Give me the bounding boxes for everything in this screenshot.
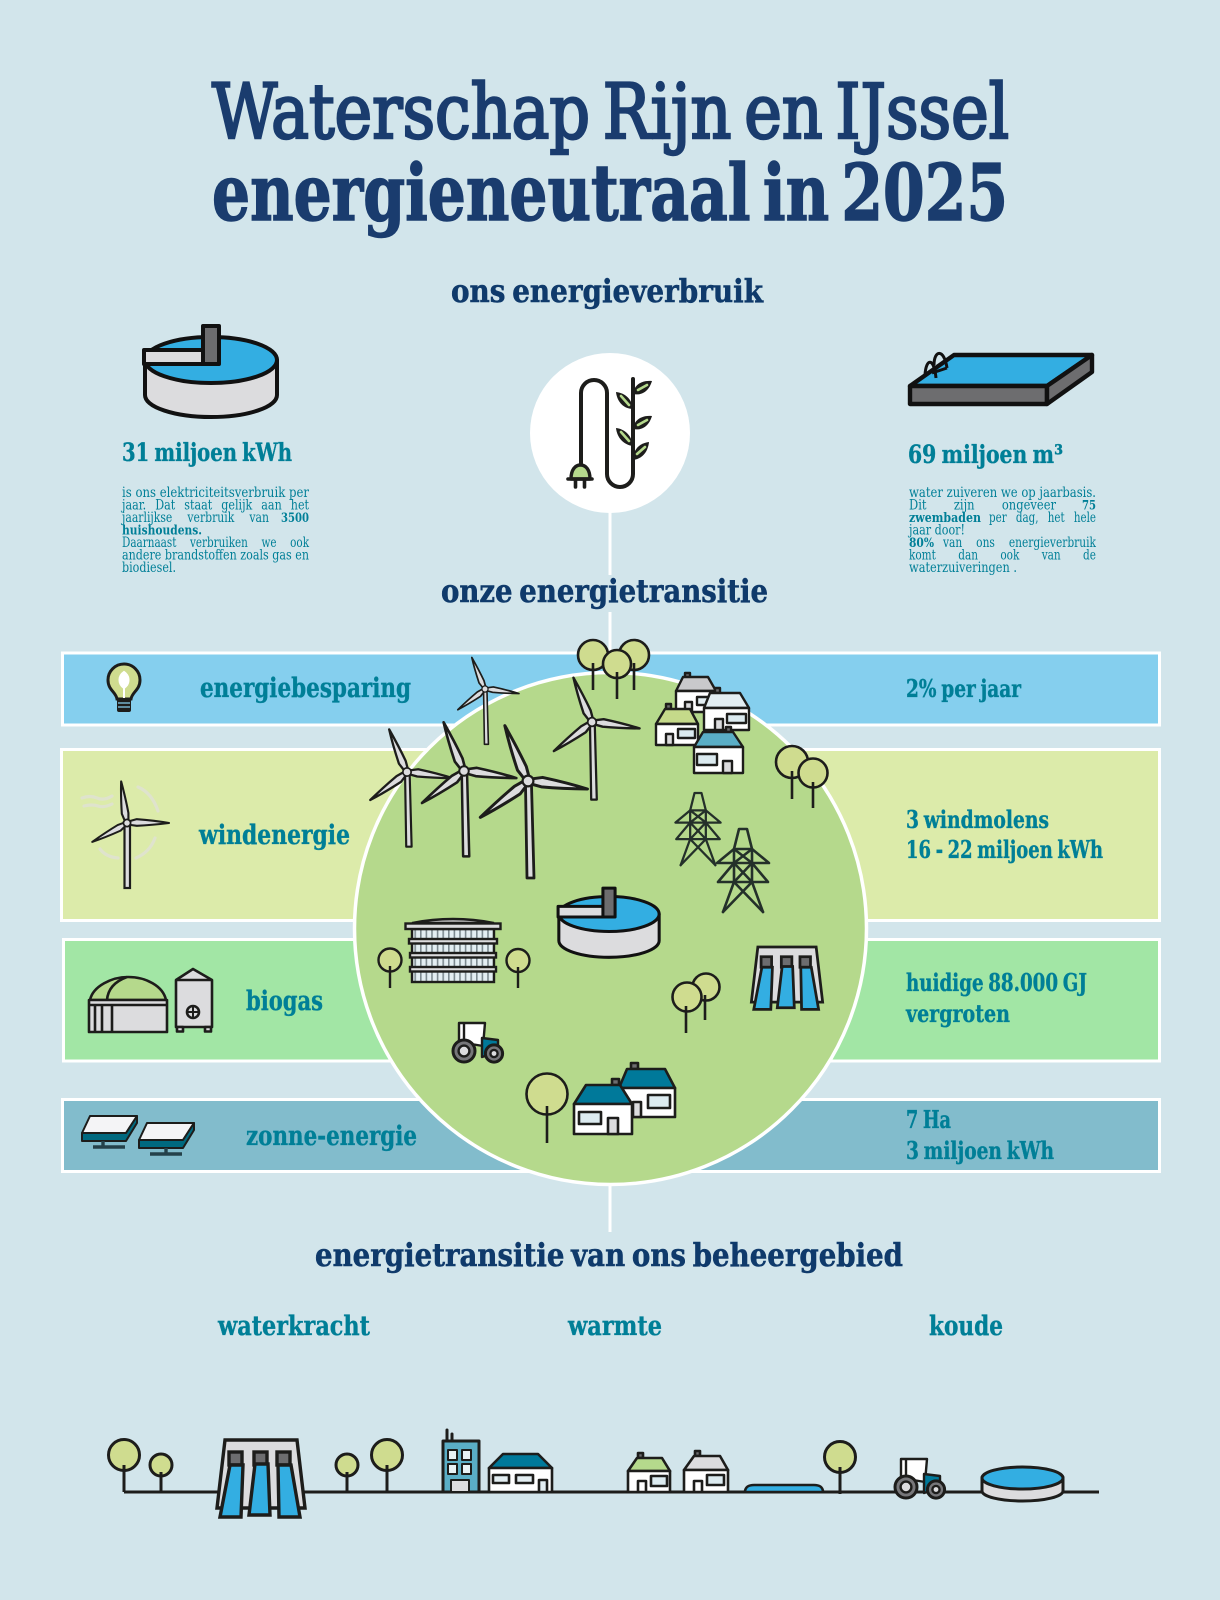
heading: onze energietransitie: onze energietransitie [441,572,768,610]
title: Waterschap Rijn en IJssel [212,67,1009,156]
band: energiebesparing [62,653,1160,725]
value: 3 windmolens [906,805,1103,864]
text block: electricity description: jaar. Dat staat gelijk aan het [120,498,309,514]
icon: trees top [578,640,649,699]
text block: electricity description: is ons elektriciteitsverbruik per [122,485,309,501]
icon: tractor [895,1459,945,1498]
band: biogas [64,940,1160,1061]
heading: energietransitie van ons beheergebied: energietransitie van ons beheergebied [315,1236,903,1274]
illustration: bottom landscape [108,1430,1099,1517]
text block: water description: Dit zijn ongeveer [909,498,1056,514]
icon: trees middle [336,1440,402,1492]
label: koude: koude [929,1311,1003,1342]
value: huidige 88.000 GJ vergroten: vergroten [905,999,1010,1028]
value: 3 windmolens: 3 windmolens [906,805,1049,834]
icon: big tree [526,1074,568,1143]
icon: solar panels [82,1116,194,1154]
icon: wind turbine with wind lines [82,781,169,888]
icon: light bulb [108,664,140,712]
icon: houses bottom [574,1063,675,1134]
text block: water description: van ons energieverbruik [942,535,1097,551]
icon: apartment building [443,1430,479,1492]
text block: water description [907,485,1097,576]
text block: water description: zwembaden [909,511,981,526]
icon: dam [217,1440,305,1517]
illustration: circle landscape [368,640,828,1143]
text block: water description: 80% [909,536,934,551]
text block: water description: 75 [1082,498,1096,514]
label: energiebesparing: energiebesparing [200,673,411,704]
text block: electricity description: Daarnaast verbruiken we ook [122,535,310,551]
icon: trees beside building [378,948,530,988]
text block: water description: per dag, het hele [989,510,1096,526]
central green circle [354,672,866,1184]
text block: water description: jaar door! [907,522,965,538]
stat: electricity use: 31 miljoen kWh [122,438,292,467]
text block: water description: water zuiveren we op jaarbasis. [909,485,1096,501]
label: windenergie: windenergie [198,820,350,851]
icon: wind turbines [368,657,640,878]
band: zonne-energie [62,1100,1160,1172]
icon: plug and plant in white circle [530,353,690,513]
icon: water treatment clarifier [144,326,277,417]
icon: hydro dam [751,947,823,1009]
icon: tractor [453,1023,503,1062]
band: windenergie [62,750,1160,920]
text block: electricity description: andere brandstoffen zoals gas en [122,548,309,564]
icon: central clarifier [558,888,659,957]
panel: 69 miljoen m3 [907,440,1097,576]
label: waterkracht: waterkracht [217,1311,371,1342]
icon: grey roof house [684,1451,728,1492]
text block: water description: komt dan ook van de [909,548,1096,564]
label: warmte: warmte [567,1311,662,1342]
icon: trees left [108,1440,172,1492]
label: zonne-energie: zonne-energie [246,1121,417,1152]
value: 3 windmolens: 16 - 22 miljoen kWh [906,835,1103,864]
icon: round office building [406,919,500,982]
ground line [124,1490,1099,1494]
label: biogas: biogas [246,986,323,1017]
icon: electricity pylons [675,793,769,912]
value: huidige 88.000 GJ vergroten [905,968,1087,1028]
icon: biogas digester and silo [89,969,212,1032]
text block: electricity description: huishoudens. [122,524,202,538]
text block: electricity description: jaarlijkse verbruik van [120,510,269,526]
icon: tree right [824,1442,856,1494]
text block: electricity description: biodiesel. [122,560,176,576]
title: energieneutraal in 2025 [212,148,1008,239]
value: 7 Ha 3 miljoen kWh: 3 miljoen kWh [906,1136,1054,1165]
icon: water basin [745,1485,823,1492]
icon: teal house [489,1454,552,1492]
title [212,67,1009,239]
icon: houses top right [656,673,749,773]
icon: green roof house [628,1453,670,1492]
icon: swimming pool [910,353,1092,404]
value: 2% per jaar: 2% per jaar [906,674,1022,703]
icon: trees right lower [672,974,720,1033]
text block: water description: waterzuiveringen . [909,560,1017,576]
text block: electricity description: 3500 [281,511,309,526]
stat: water treated: 69 miljoen m³ [908,440,1063,469]
value: huidige 88.000 GJ vergroten: huidige 88.000 GJ [906,968,1087,997]
icon: trees right [776,746,828,808]
heading: ons energieverbruik: ons energieverbruik [451,272,764,310]
icon: round basin [982,1467,1063,1501]
value: 7 Ha 3 miljoen kWh: 7 Ha [906,1105,951,1134]
connector line [608,510,612,1232]
text block: electricity description [120,485,310,576]
panel: 31 miljoen kWh [120,438,310,576]
value: 7 Ha 3 miljoen kWh [906,1105,1054,1165]
